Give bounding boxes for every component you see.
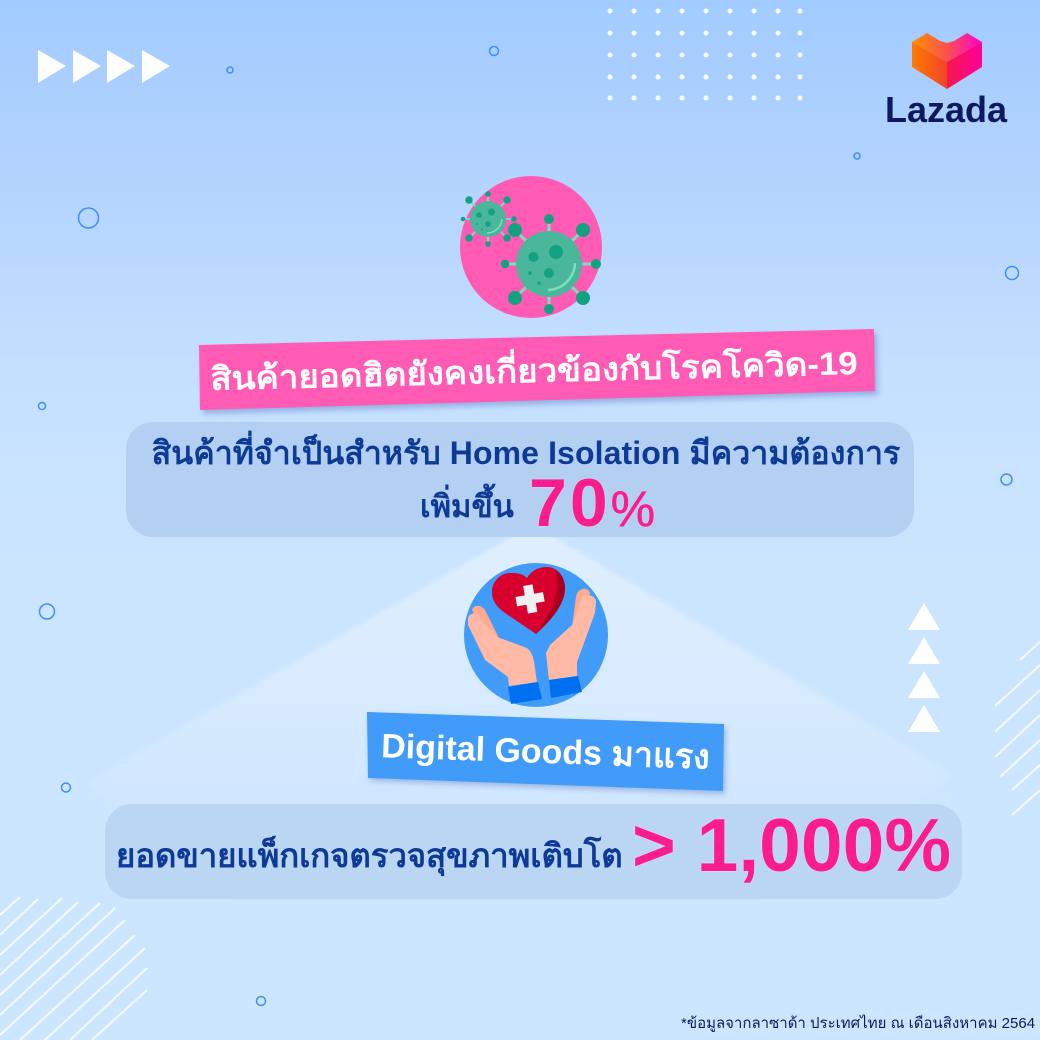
banner text: Digital Goods มาแรง bbox=[381, 727, 710, 777]
banner text: สินค้ายอดฮิตยังคงเกี่ยวข้องกับโรคโควิด-19 bbox=[210, 345, 858, 397]
icon: virus on pink circle bbox=[460, 176, 602, 318]
stat >1,000%: > 1,000% bbox=[632, 803, 951, 887]
panel: digital goods bbox=[105, 804, 962, 899]
panel text line 2: เพิ่มขึ้น bbox=[420, 489, 514, 524]
panel text: ยอดขายแพ็กเกจตรวจสุขภาพเติบโต bbox=[116, 837, 623, 874]
footnote: *ข้อมูลจากลาซาด้า ประเทศไทย ณ เดือนสิงหาคม 2564 bbox=[681, 1015, 1035, 1032]
blue banner bbox=[366, 712, 729, 796]
heart bbox=[492, 567, 565, 634]
Lazada logo bbox=[885, 33, 1008, 130]
Lazada logo: Lazada bbox=[885, 89, 1007, 130]
right hand bbox=[546, 589, 596, 680]
panel text line 1: สินค้าที่จำเป็นสำหรับ Home Isolation มีความต้องการ bbox=[152, 435, 900, 471]
left hand bbox=[468, 606, 537, 686]
icon: hands holding heart bbox=[464, 563, 608, 707]
pink banner bbox=[199, 329, 880, 416]
stat 70%: 70% bbox=[529, 465, 655, 541]
panel: home isolation bbox=[126, 422, 914, 537]
